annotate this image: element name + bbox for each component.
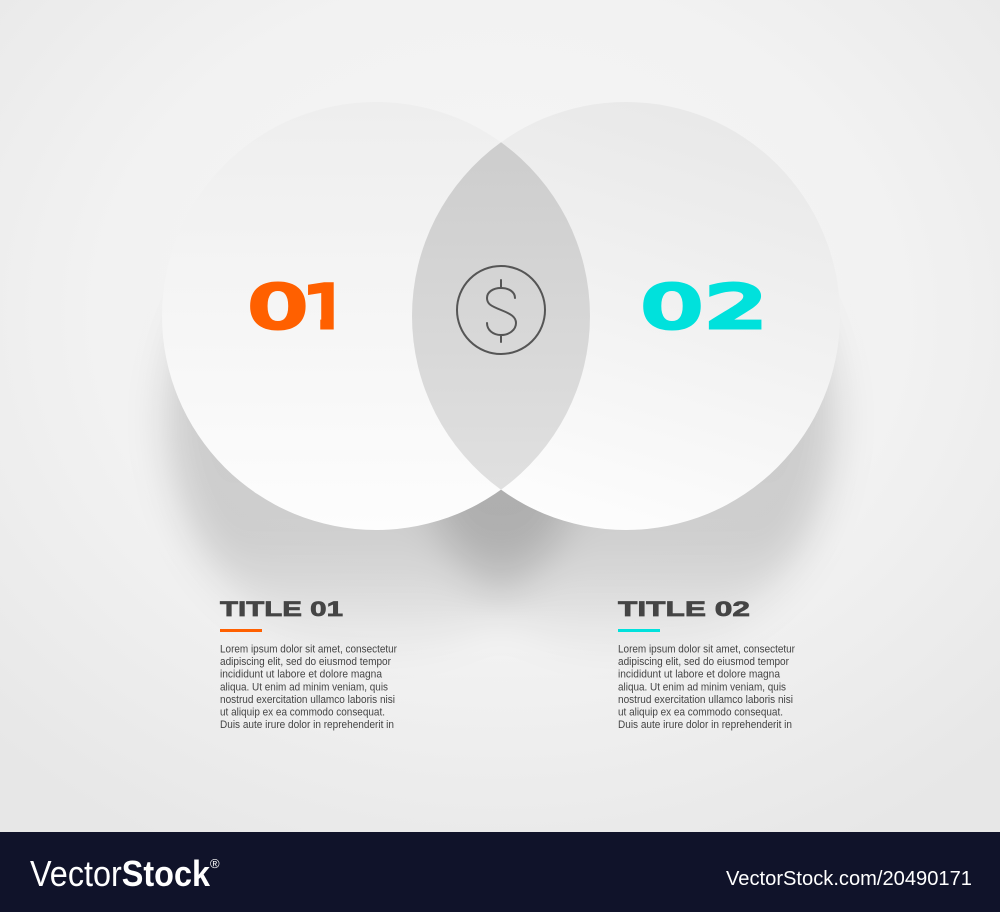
overlap lens — [412, 142, 590, 490]
number 01: 1 — [303, 273, 351, 341]
heading: title 01: TITLE 01 — [220, 598, 343, 621]
circle shadows — [168, 185, 834, 655]
text block: column 1 — [220, 644, 397, 731]
text block: column 2: aliqua. Ut enim ad minim veniam, quis — [618, 681, 786, 693]
text block: column 1: Lorem ipsum dolor sit amet, consectetur — [220, 644, 397, 656]
text block: column 1: aliqua. Ut enim ad minim veniam, quis — [220, 681, 388, 693]
text block: column 1: ut aliquip ex ea commodo consequat. — [220, 706, 385, 718]
circle: right — [412, 102, 840, 530]
text block: column 2: incididunt ut labore et dolore magna — [618, 669, 781, 681]
footer url: VectorStock.com/20490171 — [726, 868, 972, 890]
text block: column 2: Duis aute irure dolor in reprehenderit in — [618, 719, 792, 731]
registered mark: ® — [210, 856, 220, 871]
circle: left — [162, 102, 590, 530]
underline: title 01 — [220, 629, 262, 632]
text block: column 2: adipiscing elit, sed do eiusmod tempor — [618, 656, 789, 668]
text block: column 2: Lorem ipsum dolor sit amet, consectetur — [618, 644, 795, 656]
number 01 — [248, 273, 334, 341]
footer logo: VectorStock — [30, 853, 211, 894]
footer bar — [0, 832, 1000, 912]
heading: title 02: TITLE 02 — [618, 598, 750, 621]
number 02 — [641, 273, 767, 341]
text block: column 1: incididunt ut labore et dolore magna — [220, 669, 383, 681]
text block: column 2 — [618, 644, 795, 731]
text block: column 2: ut aliquip ex ea commodo consequat. — [618, 706, 783, 718]
text block: column 1: nostrud exercitation ullamco laboris nisi — [220, 694, 395, 706]
number 01: 0 — [248, 273, 308, 341]
text block: column 1: adipiscing elit, sed do eiusmod tempor — [220, 656, 391, 668]
icon: dollar coin — [457, 266, 545, 354]
underline: title 02 — [618, 629, 660, 632]
text block: column 1: Duis aute irure dolor in reprehenderit in — [220, 719, 394, 731]
text block: column 2: nostrud exercitation ullamco laboris nisi — [618, 694, 793, 706]
number 02: 2 — [706, 273, 767, 341]
number 02: 0 — [641, 273, 703, 341]
